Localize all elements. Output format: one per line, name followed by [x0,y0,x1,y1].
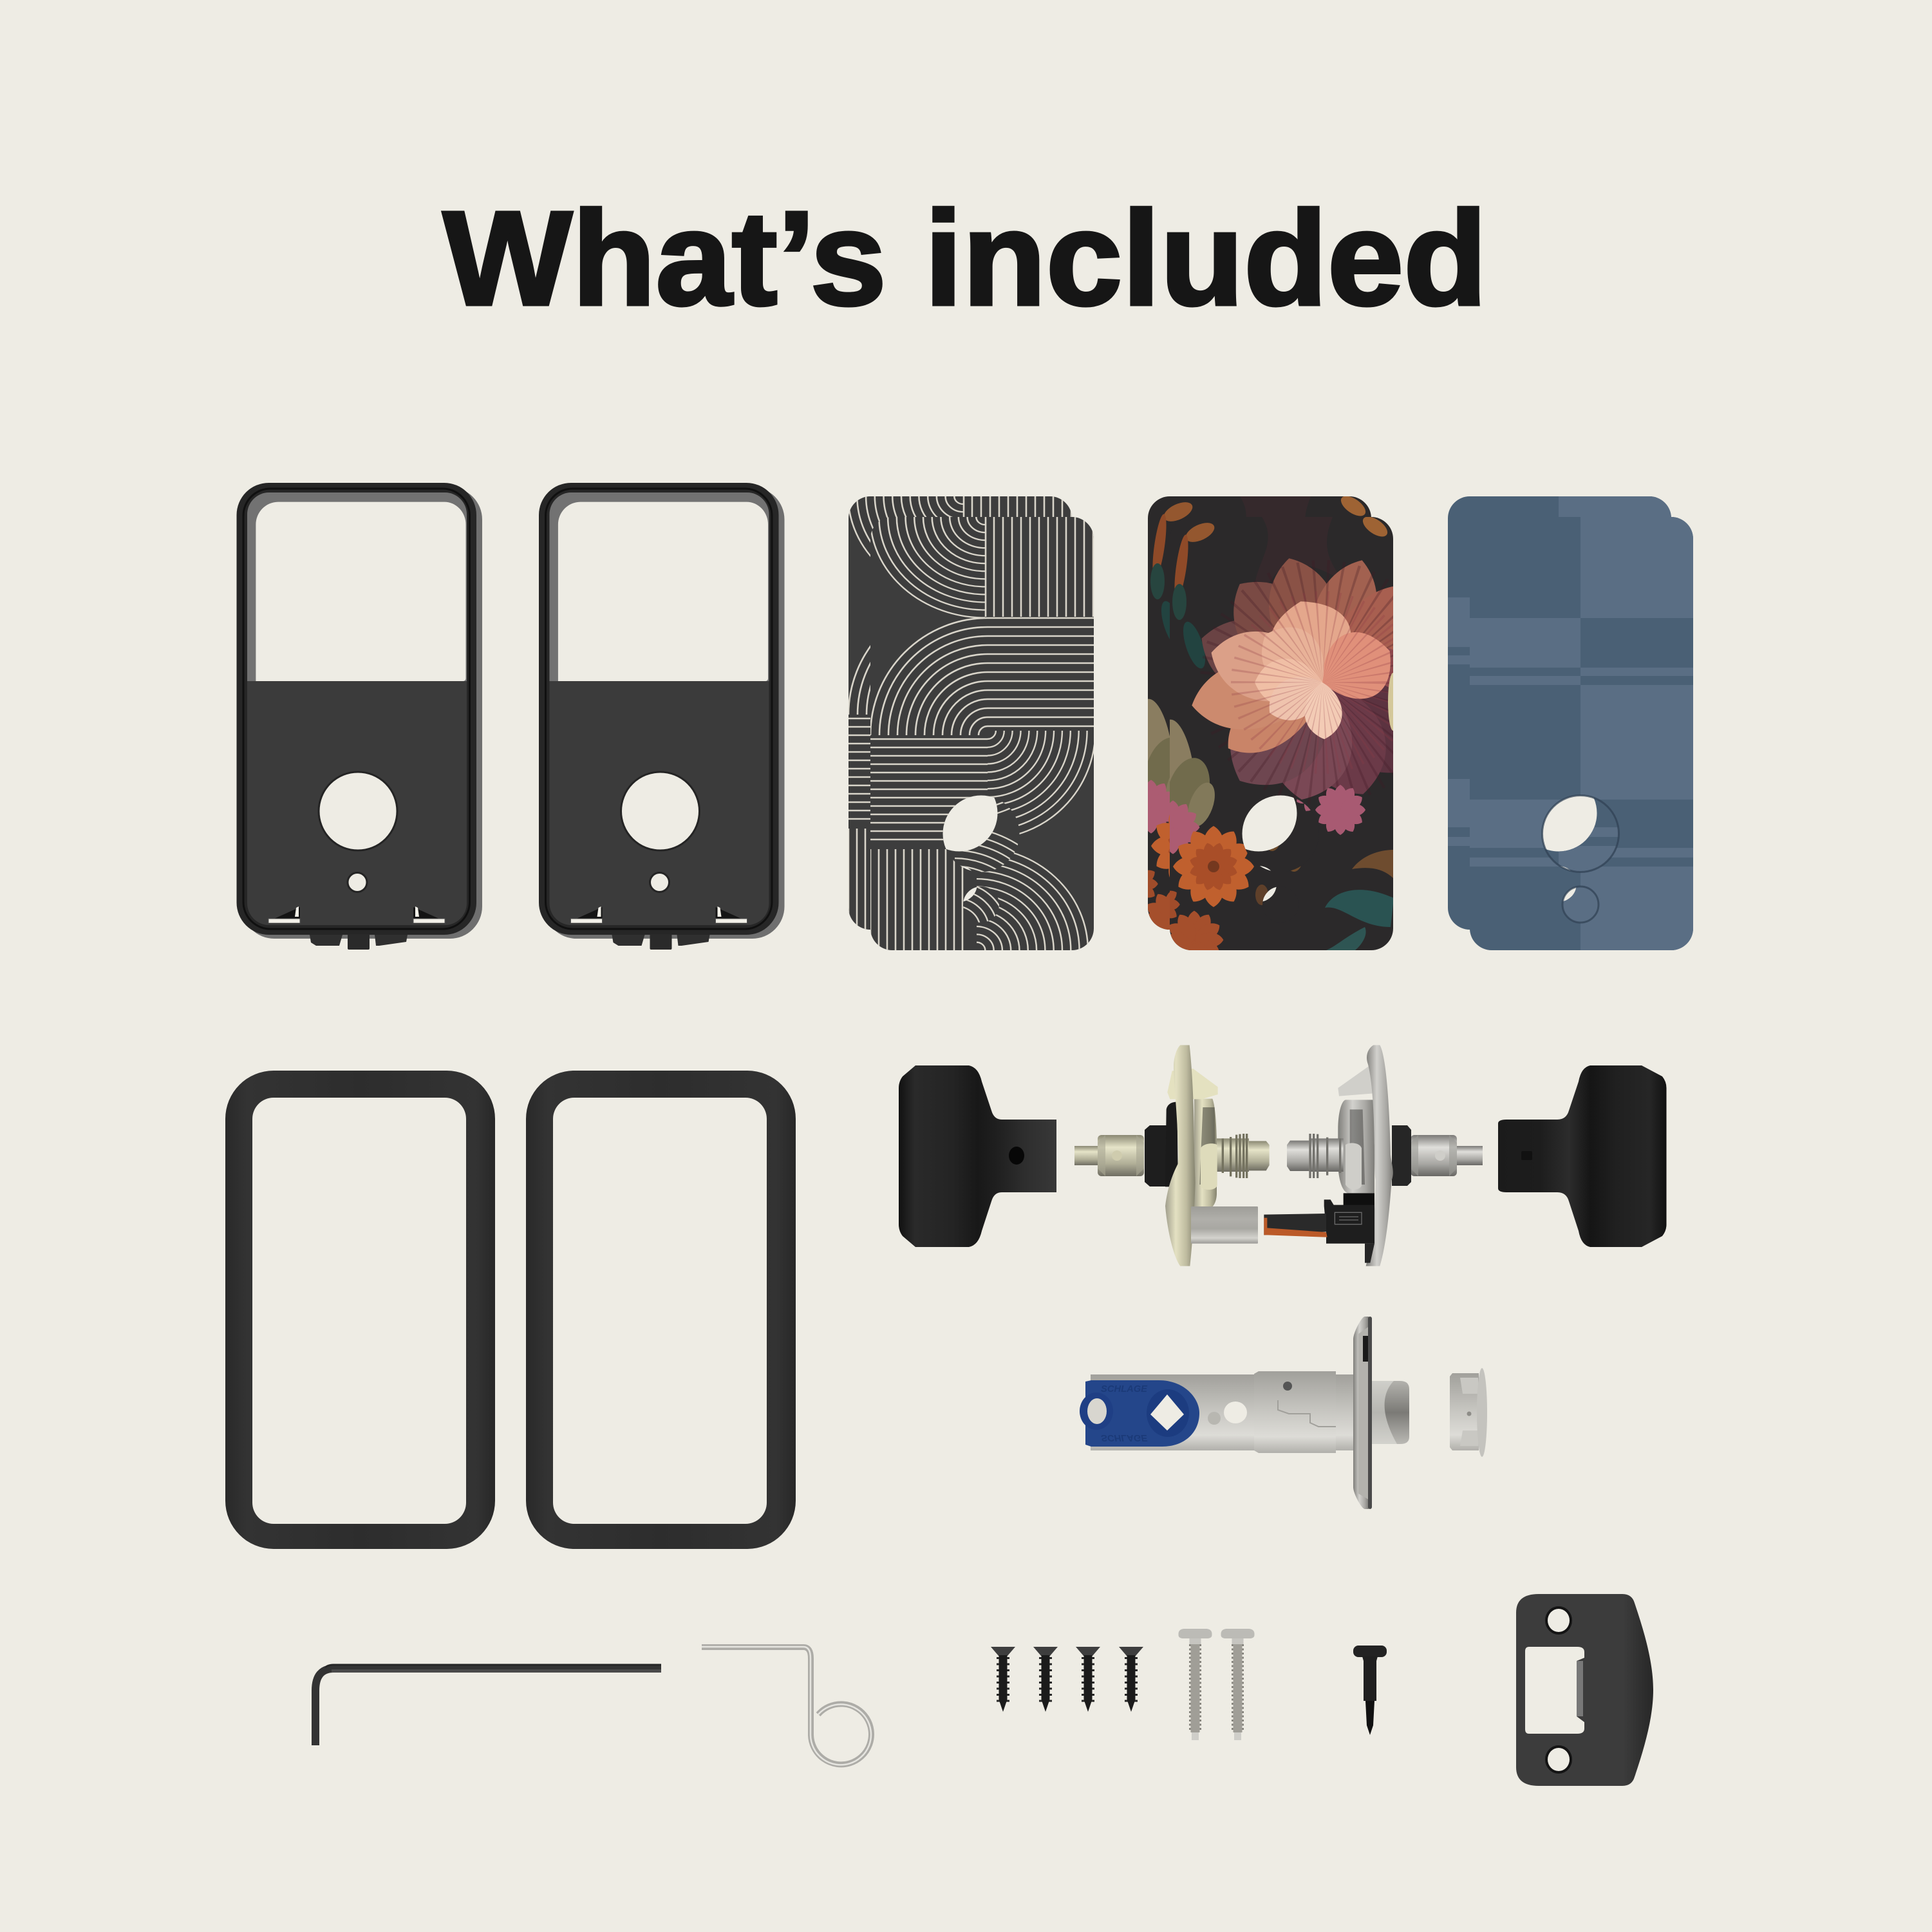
cover plate: floral pattern [1148,496,1393,950]
right plate, spring and connector [1264,1045,1393,1266]
rubber gasket 1 [225,1071,495,1549]
rubber gasket 2 [526,1071,796,1549]
black strike plate [1516,1594,1653,1786]
front floral cover [1170,517,1393,950]
front plaid cover [1470,517,1693,950]
wire pull tool [702,1647,871,1765]
four black wood screws [991,1647,1143,1712]
faceplate frame 2 [539,483,784,950]
back floral cover [1148,496,1371,930]
latch case [1091,1374,1254,1450]
left spindle [1074,1125,1175,1186]
back plaid cover [1448,496,1671,930]
right black knob [1498,1065,1666,1247]
allen key [315,1665,661,1745]
cover plate: blue plaid pattern [1448,496,1693,950]
title: What’s included [443,184,1487,333]
latch cylinder [1254,1371,1336,1453]
left plate and spring [1165,1045,1270,1266]
latch holes [1224,1402,1247,1423]
right spindle [1392,1125,1483,1186]
left black knob [899,1065,1056,1247]
infographic canvas [225,206,1693,1786]
latch collar ring [1450,1368,1487,1457]
right lock assembly (silver) [1264,1045,1483,1266]
black set screw [1353,1646,1387,1735]
two long silver machine screws [1178,1629,1254,1740]
latch bolt tongue [1372,1381,1409,1444]
back line art cover [849,496,1072,930]
latch brand marks: SCHLAGE [1101,1383,1148,1394]
faceplate frame 1 [237,483,482,950]
latch faceplate [1353,1317,1369,1509]
front line art cover [870,517,1094,950]
latch brand mark mirrored: SCHLAGE [1101,1432,1148,1443]
left lock assembly (brass) [1074,1045,1270,1266]
latch bolt [1080,1317,1409,1509]
plaid hole edges [1543,796,1618,923]
latch blue plastic cap [1085,1380,1199,1447]
cover plate: line art pattern [849,496,1094,950]
